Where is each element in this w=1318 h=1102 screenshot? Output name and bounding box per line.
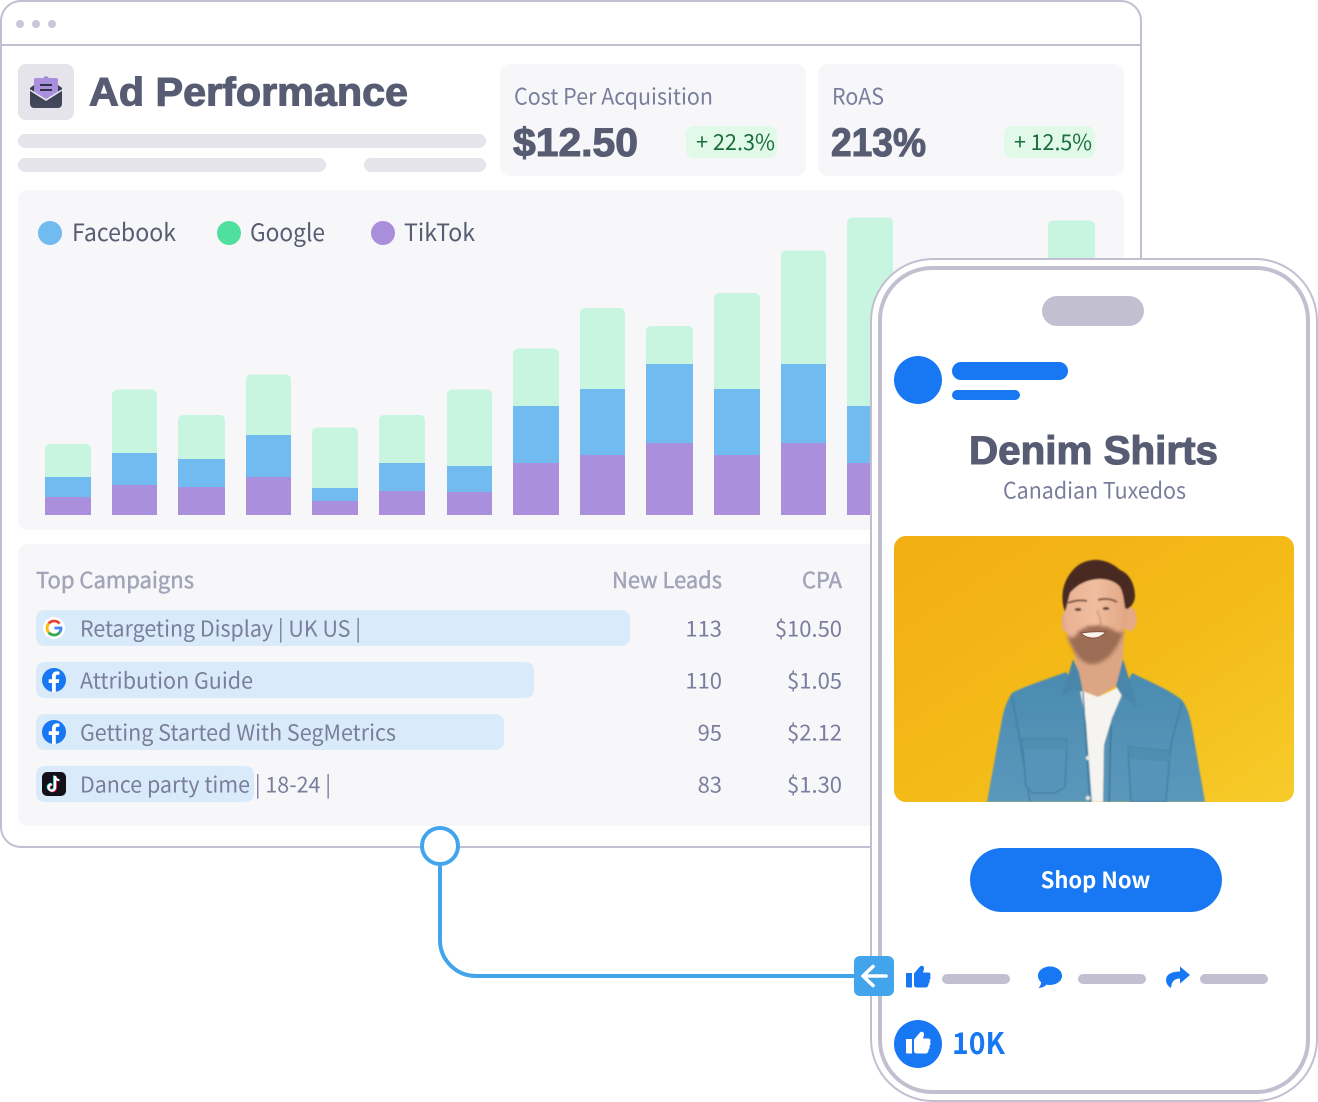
- icon: comment: [1038, 966, 1062, 988]
- connector start node: [422, 828, 458, 864]
- denim shirt left: [987, 672, 1092, 802]
- row: getting started: 95: [698, 716, 722, 748]
- ad headline: Denim Shirts: [969, 429, 1218, 473]
- row: retargeting display: Retargeting Display | UK US |: [80, 612, 361, 644]
- row: dance party time: $1.30: [787, 768, 842, 800]
- collars: [1068, 658, 1084, 693]
- denim shirt right: [1103, 673, 1205, 802]
- placeholder: share count: [1200, 974, 1268, 984]
- legend: Google: [250, 213, 325, 248]
- pockets: [1022, 739, 1067, 793]
- row: getting started: $2.12: [787, 716, 842, 748]
- row: dance party time: [36, 766, 842, 802]
- icon: share: [1166, 966, 1190, 988]
- eyes: [1074, 608, 1082, 611]
- panel: RoAS: RoAS: [832, 80, 884, 112]
- ad subheading: Canadian Tuxedos: [1003, 474, 1186, 506]
- sleeve seams: [1012, 696, 1182, 802]
- row: attribution guide: 110: [685, 664, 722, 696]
- post author placeholder: [894, 356, 1068, 404]
- bars: facebook series: [45, 364, 893, 501]
- row: attribution guide: $1.05: [787, 664, 842, 696]
- shop now button: Shop Now: [1041, 863, 1150, 895]
- ad photo: smiling man in denim shirt: [894, 536, 1294, 802]
- nose shading: [1086, 610, 1101, 628]
- placeholder: comment count: [1078, 974, 1146, 984]
- t-shirt: [1080, 687, 1122, 802]
- phone notch: [1042, 296, 1144, 326]
- panel: top campaigns table: [18, 544, 1124, 826]
- window control dots: [16, 20, 56, 28]
- row: dance party time: 83: [698, 768, 722, 800]
- table header: Top Campaigns: [36, 563, 194, 595]
- row: retargeting display: [36, 610, 842, 646]
- beard stubble: [1067, 626, 1124, 664]
- panel: RoAS: 213%: [831, 121, 926, 165]
- row: getting started: [36, 714, 842, 750]
- table header: CPA: [802, 563, 843, 595]
- placeholder text lines: [18, 134, 486, 172]
- row: attribution guide: Attribution Guide: [80, 664, 253, 696]
- icon: like: [906, 966, 931, 988]
- row: getting started: Getting Started With SegMetrics: [80, 716, 396, 748]
- legend: TikTok: [404, 213, 475, 248]
- table header: New Leads: [612, 563, 722, 595]
- table header: [36, 563, 843, 595]
- neck: [1072, 632, 1124, 697]
- icon: like badge: [894, 1020, 942, 1068]
- connector line: [440, 866, 856, 976]
- placket: [1083, 692, 1111, 802]
- panel: RoAS: + 12.5%: [1014, 125, 1092, 157]
- title: Ad Performance: [89, 70, 408, 114]
- panel: cost per acquisition: [500, 64, 806, 176]
- row: attribution guide: [36, 662, 842, 698]
- panel: RoAS: [818, 64, 1124, 176]
- browser window: [1, 1, 1141, 847]
- bars: tiktok series: [45, 443, 893, 515]
- eyebrows: [1068, 599, 1117, 603]
- row: dance party time: Dance party time | 18-24 |: [80, 768, 331, 800]
- shop now button: [970, 848, 1222, 912]
- phone mockup: [871, 259, 1317, 1101]
- bars: google series: [45, 218, 1095, 488]
- icon: open envelope: [18, 64, 74, 120]
- panel: cost per acquisition: + 22.3%: [696, 125, 775, 157]
- legend: Facebook: [72, 213, 176, 248]
- ears: [1124, 607, 1136, 631]
- like count: 10K: [952, 1019, 1005, 1063]
- hair: [1062, 560, 1135, 612]
- row: retargeting display: 113: [685, 612, 722, 644]
- row: retargeting display: $10.50: [775, 612, 842, 644]
- arrow: back to dashboard: [854, 956, 894, 996]
- face: [1063, 578, 1127, 649]
- panel: cost per acquisition: $12.50: [513, 121, 638, 165]
- mouth: [1081, 632, 1106, 638]
- placeholder: like count: [942, 974, 1010, 984]
- panel: cost per acquisition: Cost Per Acquisition: [514, 80, 713, 112]
- legend: [38, 213, 475, 248]
- panel: stacked bar chart: [18, 190, 1124, 530]
